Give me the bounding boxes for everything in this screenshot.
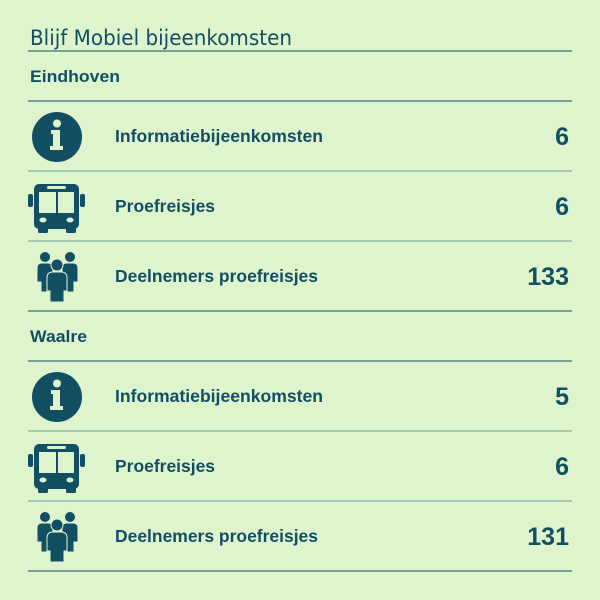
row: Informatiebijeenkomsten: 5 (555, 383, 569, 411)
icon: info (32, 112, 82, 162)
row: Proefreisjes: 6 (555, 453, 569, 481)
icon: info (32, 372, 82, 422)
row: Deelnemers: 133 (527, 263, 569, 291)
row: Proefreisjes (28, 184, 569, 233)
row: Deelnemers: Deelnemers proefreisjes (115, 526, 318, 546)
row: Deelnemers: Deelnemers proefreisjes (115, 266, 318, 286)
section: Eindhoven (28, 67, 572, 311)
icon: bus (28, 444, 85, 493)
title: Blijf Mobiel bijeenkomsten (30, 26, 292, 50)
icon: people (37, 252, 78, 302)
row: Deelnemers (37, 512, 569, 562)
section: Waalre (28, 327, 572, 571)
icon: bus (28, 184, 85, 233)
row: Informatiebijeenkomsten (32, 112, 569, 162)
heading: Eindhoven: Eindhoven (30, 67, 120, 86)
row: Proefreisjes: Proefreisjes (115, 196, 215, 216)
row: Deelnemers (37, 252, 569, 302)
row: Informatiebijeenkomsten: Informatiebijeenkomsten (115, 126, 323, 146)
row: Deelnemers: 131 (527, 523, 569, 551)
row: Informatiebijeenkomsten (32, 372, 569, 422)
row: Proefreisjes: 6 (555, 193, 569, 221)
row: Proefreisjes: Proefreisjes (115, 456, 215, 476)
row: Informatiebijeenkomsten: 6 (555, 123, 569, 151)
row: Informatiebijeenkomsten: Informatiebijeenkomsten (115, 386, 323, 406)
row: Proefreisjes (28, 444, 569, 493)
heading: Waalre: Waalre (30, 327, 87, 346)
icon: people (37, 512, 78, 562)
